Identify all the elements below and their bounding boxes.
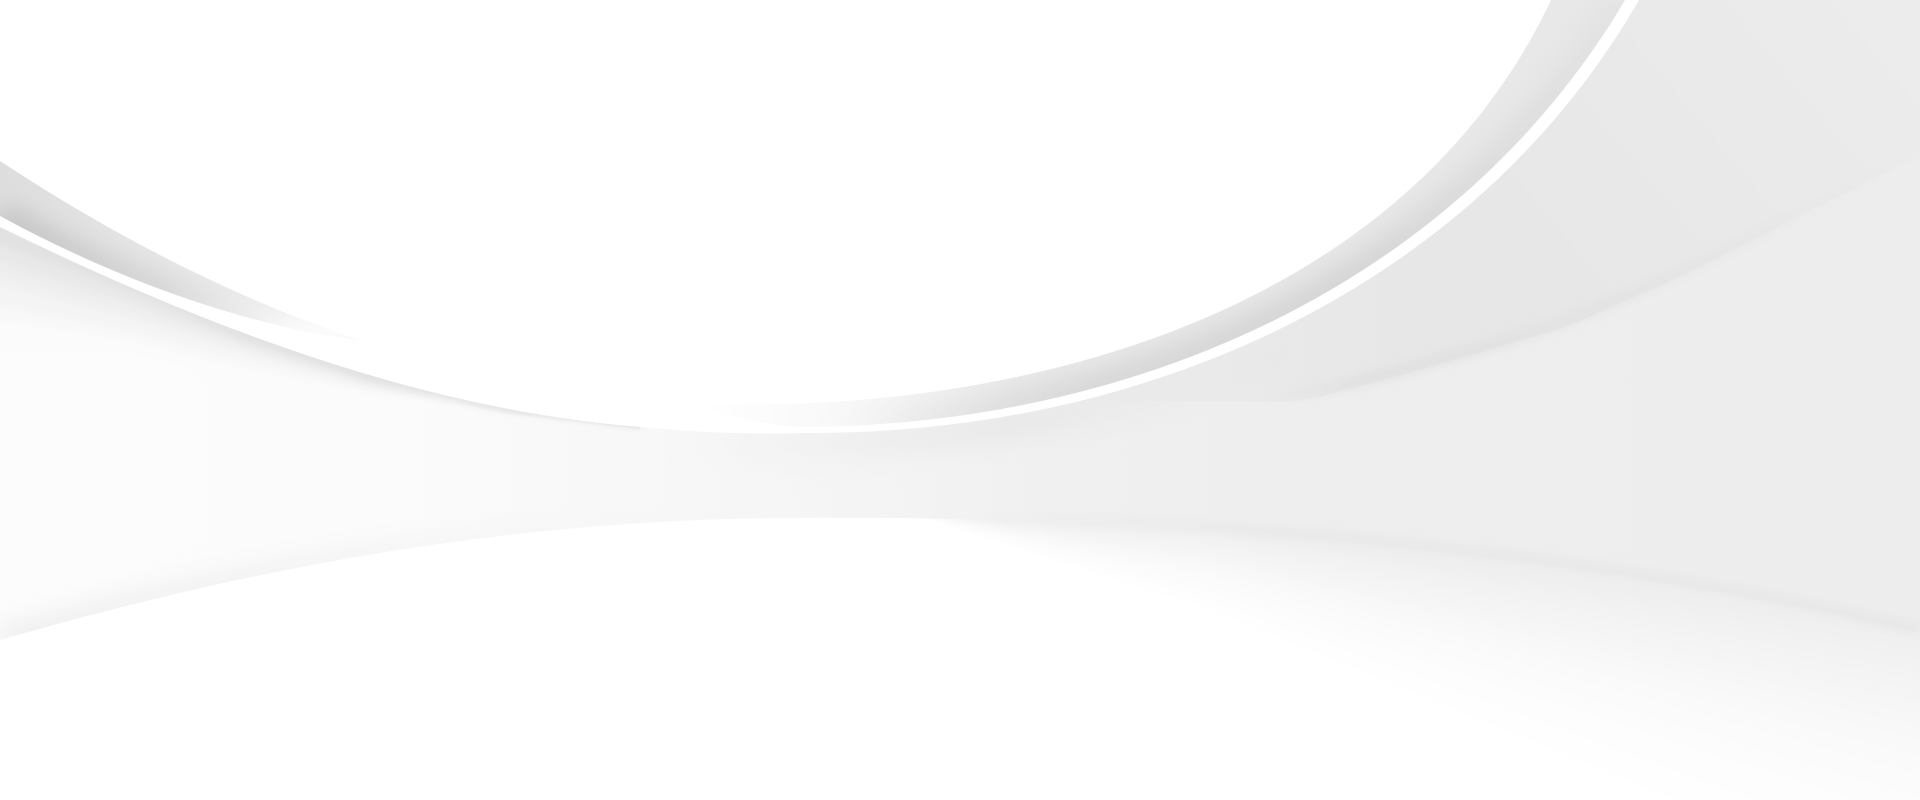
tint along the left lower edge of the band — [10, 600, 144, 637]
crisp base of the shadow under the white arc, left — [0, 200, 640, 429]
grey band between the white arc and the lower curve — [0, 150, 1920, 670]
crescent inner shading — [932, 82, 1570, 419]
soft fade below the lower curve on the right — [900, 500, 1920, 800]
soft shadow under the white arc, centre — [680, 345, 1300, 444]
shadow line along the lower curve — [950, 517, 1920, 630]
upper right grey sheet above the ridge — [1000, 0, 1920, 402]
soft shadow under the white arc, left — [0, 200, 640, 429]
right grey crescent — [844, 0, 1625, 426]
left grey crescent — [0, 161, 300, 327]
large white arc shape — [0, 0, 1639, 433]
ridge shadow on the right — [1280, 152, 1920, 396]
crescent inner shading — [0, 216, 359, 340]
